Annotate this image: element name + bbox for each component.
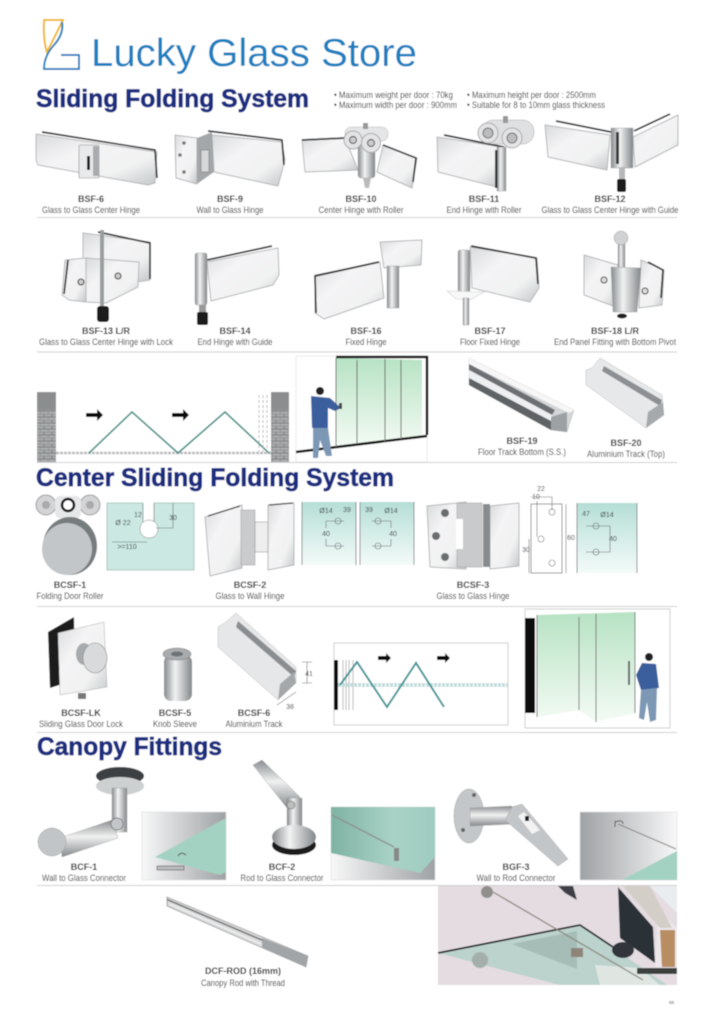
illustration: person sliding folding door bbox=[296, 356, 427, 462]
product: BCSF-6 aluminium track: 41 bbox=[305, 671, 313, 678]
diagram: BCSF-3 drilling layout: 47 bbox=[582, 511, 590, 518]
diagram: BCSF-3 plate dimensions: 22 bbox=[537, 486, 545, 493]
product: BCF-1 bbox=[38, 767, 144, 883]
diagram: BCSF-1 glass cut-out: 12 bbox=[134, 512, 142, 519]
product: BSF-17: Floor Fixed Hinge bbox=[460, 337, 520, 347]
diagram: BCSF-1 glass cut-out: 30 bbox=[169, 515, 177, 522]
product: BCF-1: Wall to Glass Connector bbox=[42, 873, 126, 883]
product: BCSF-5 knob sleeve: BCSF-5 bbox=[159, 708, 191, 718]
product: BSF-13 L/R: Glass to Glass Center Hinge with Lock bbox=[39, 337, 173, 347]
product: BCSF-LK lock bbox=[39, 617, 123, 729]
photo: canopy installation bbox=[438, 886, 677, 985]
dividers bbox=[37, 217, 677, 886]
diagram: BCSF-1 glass cut-out: >=110 bbox=[117, 544, 137, 551]
diagram: BCSF-3 plate dimensions bbox=[522, 486, 575, 573]
panel: BCF-2 installation bbox=[331, 807, 435, 880]
diagram: BCSF-2 drilling layout: 39 bbox=[365, 507, 373, 514]
diagram: BCSF-3 plate dimensions: 30 bbox=[522, 547, 530, 554]
product: BSF-12 bbox=[542, 114, 678, 215]
product: DCF-ROD: Canopy Rod with Thread bbox=[201, 978, 285, 988]
product: BCSF-6 aluminium track: BCSF-6 bbox=[238, 708, 270, 718]
product: BSF-6: BSF-6 bbox=[78, 194, 104, 204]
panel: BCF-1 installation bbox=[142, 812, 226, 880]
specification list: • Maximum height per door : 2500mm bbox=[467, 90, 596, 100]
heading: center sliding folding system: Center Sliding Folding System bbox=[36, 464, 394, 492]
product: BCSF-5 knob sleeve bbox=[153, 648, 197, 729]
product: BCF-1: BCF-1 bbox=[71, 862, 97, 872]
title: Lucky Glass Store bbox=[91, 32, 417, 75]
product: BSF-9: BSF-9 bbox=[217, 194, 243, 204]
specification list bbox=[334, 90, 605, 110]
product: BGF-3: Wall to Rod Connector bbox=[476, 873, 556, 883]
product: BSF-10 bbox=[302, 123, 417, 215]
heading: sliding folding system: Sliding Folding System bbox=[36, 85, 309, 113]
product: BSF-6 bbox=[36, 132, 157, 215]
diagram: BCSF-1 glass cut-out bbox=[107, 502, 194, 570]
product: BSF-17 bbox=[447, 246, 539, 347]
product: BSF-19 floor track bbox=[469, 358, 574, 457]
product: BSF-16: BSF-16 bbox=[350, 326, 382, 336]
product: BSF-14: End Hinge with Guide bbox=[198, 337, 272, 347]
product: BSF-9 bbox=[175, 131, 285, 215]
product: BCSF-3 hinge: BCSF-3 bbox=[457, 580, 489, 590]
product: BSF-18 L/R: End Panel Fitting with Bottom Pivot bbox=[554, 337, 676, 347]
diagram: BCSF-2 drilling layout bbox=[302, 502, 414, 565]
product: BSF-19 floor track: Floor Track Bottom (S.S.) bbox=[478, 447, 566, 457]
product: BSF-12: BSF-12 bbox=[594, 194, 626, 204]
specification list: • Suitable for 8 to 10mm glass thickness bbox=[467, 100, 605, 110]
product: BCSF-3 hinge: Glass to Glass Hinge bbox=[436, 591, 510, 601]
product: BCSF-1 roller: BCSF-1 bbox=[54, 580, 86, 590]
product: BCF-2 bbox=[240, 760, 324, 883]
product: BGF-3: BGF-3 bbox=[502, 862, 530, 872]
product: BSF-12: Glass to Glass Center Hinge with Guide bbox=[542, 205, 678, 215]
product: BCSF-2 hinge bbox=[205, 503, 294, 601]
product: BCSF-3 hinge bbox=[427, 502, 519, 601]
product: BSF-18 L/R: BSF-18 L/R bbox=[591, 326, 639, 336]
product: BCSF-LK lock: BCSF-LK bbox=[61, 708, 101, 718]
heading: canopy fittings: Canopy Fittings bbox=[37, 733, 222, 761]
diagram: BCSF-2 drilling layout: 40 bbox=[389, 531, 397, 538]
product: BGF-3 bbox=[454, 789, 568, 883]
product: DCF-ROD: DCF-ROD (16mm) bbox=[205, 966, 281, 976]
specification list: • Maximum weight per door : 70kg bbox=[334, 90, 453, 100]
page number: 68 bbox=[669, 1000, 675, 1005]
product: BCSF-2 hinge: Glass to Wall Hinge bbox=[216, 591, 284, 601]
product: BSF-18 L/R bbox=[554, 231, 676, 347]
panel: BGF-3 installation bbox=[580, 812, 677, 880]
logo bbox=[44, 20, 79, 69]
product: BSF-11 bbox=[437, 116, 534, 215]
product: BSF-17: BSF-17 bbox=[474, 326, 506, 336]
diagram: BCSF-2 drilling layout: 40 bbox=[322, 531, 330, 538]
product: BSF-11: BSF-11 bbox=[469, 194, 499, 204]
diagram: BCSF-2 drilling layout: Ø14 bbox=[384, 508, 398, 515]
diagram: BCSF-2 drilling layout: 39 bbox=[343, 507, 351, 514]
specification list: • Maximum width per door : 900mm bbox=[334, 100, 457, 110]
diagram: BCSF-3 drilling layout: 40 bbox=[609, 536, 617, 543]
product: BCF-2: BCF-2 bbox=[269, 862, 295, 872]
product: BSF-16: Fixed Hinge bbox=[346, 337, 386, 347]
product: BSF-10: Center Hinge with Roller bbox=[318, 205, 404, 215]
product: BSF-14 bbox=[195, 246, 279, 347]
product: BSF-11: End Hinge with Roller bbox=[446, 205, 522, 215]
product: BCSF-2 hinge: BCSF-2 bbox=[234, 580, 266, 590]
product: BSF-9: Wall to Glass Hinge bbox=[196, 205, 264, 215]
product: BCSF-6 aluminium track bbox=[218, 613, 313, 729]
product: BSF-16 bbox=[315, 240, 422, 347]
diagram: BCSF-3 drilling layout: Ø14 bbox=[600, 512, 614, 519]
product: BSF-20 aluminium track bbox=[586, 358, 665, 459]
diagram: BCSF-1 glass cut-out: Ø 22 bbox=[115, 520, 131, 527]
product: BSF-20 aluminium track: Aluminium Track (Top) bbox=[587, 449, 665, 459]
product: BCSF-1 roller bbox=[36, 495, 104, 601]
center folding sequence diagram bbox=[334, 643, 508, 725]
product: DCF-ROD bbox=[167, 897, 308, 988]
product: BCSF-LK lock: Sliding Glass Door Lock bbox=[39, 719, 123, 729]
diagram: BCSF-2 drilling layout: Ø14 bbox=[319, 508, 333, 515]
diagram: BCSF-3 drilling layout bbox=[577, 503, 637, 573]
illustration: person center folding door bbox=[525, 609, 670, 728]
product: BSF-20 aluminium track: BSF-20 bbox=[610, 438, 642, 448]
product: BCF-2: Rod to Glass Connector bbox=[240, 873, 324, 883]
diagram: BCSF-3 plate dimensions: 10 bbox=[532, 494, 540, 501]
product: BSF-13 L/R: BSF-13 L/R bbox=[82, 326, 130, 336]
product: BSF-14: BSF-14 bbox=[219, 326, 251, 336]
product: BCSF-1 roller: Folding Door Roller bbox=[36, 591, 104, 601]
product: BCSF-5 knob sleeve: Knob Sleeve bbox=[153, 719, 197, 729]
product: BSF-13 L/R bbox=[39, 230, 173, 347]
diagram: BCSF-3 plate dimensions: 60 bbox=[567, 535, 575, 542]
product: BCSF-6 aluminium track: Aluminium Track bbox=[226, 719, 283, 729]
folding sequence diagram bbox=[37, 392, 289, 462]
product: BSF-6: Glass to Glass Center Hinge bbox=[42, 205, 140, 215]
product: BCSF-6 aluminium track: 38 bbox=[286, 704, 294, 711]
product: BSF-10: BSF-10 bbox=[345, 194, 377, 204]
product: BSF-19 floor track: BSF-19 bbox=[506, 436, 538, 446]
